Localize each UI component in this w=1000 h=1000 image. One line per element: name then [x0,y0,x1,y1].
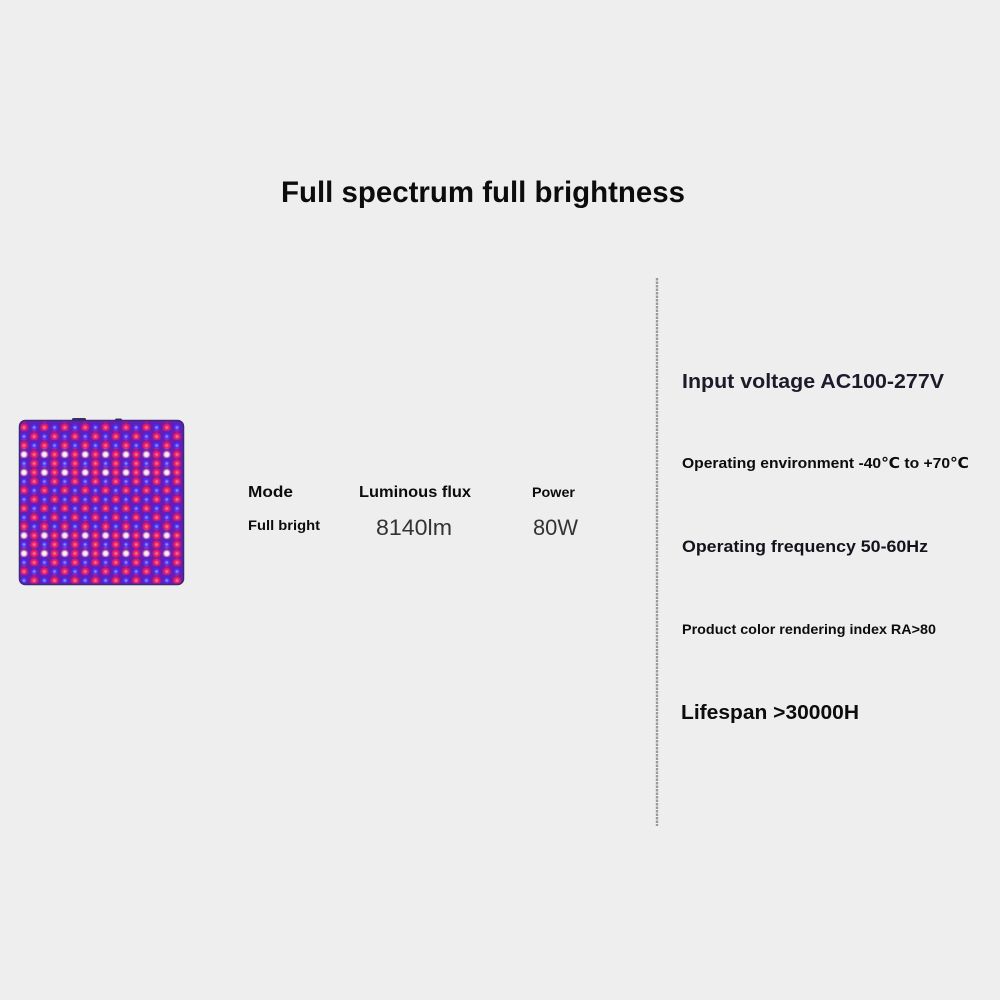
icon: LED grow light panel [19,418,184,585]
value: full bright: Full bright [248,517,320,533]
heading: mode: Mode [248,484,293,501]
spec: operating frequency: Operating frequency 50-60Hz [682,538,928,556]
heading: power: Power [532,484,576,500]
spec: operating environment: Operating environment -40℃ to +70℃ [682,455,969,472]
spec: color rendering index: Product color rendering index RA>80 [682,621,936,637]
heading: luminous flux: Luminous flux [359,484,471,501]
dotted divider [656,278,658,826]
spec list [681,371,969,724]
spec table: mode, luminous flux, power [248,484,578,540]
spec: lifespan: Lifespan >30000H [681,702,859,724]
spec: input voltage: Input voltage AC100-277V [682,371,945,393]
value: luminous flux 8140lm: 8140lm [376,515,452,540]
title: Full spectrum full brightness [281,176,685,209]
value: power 80W: 80W [533,515,578,540]
